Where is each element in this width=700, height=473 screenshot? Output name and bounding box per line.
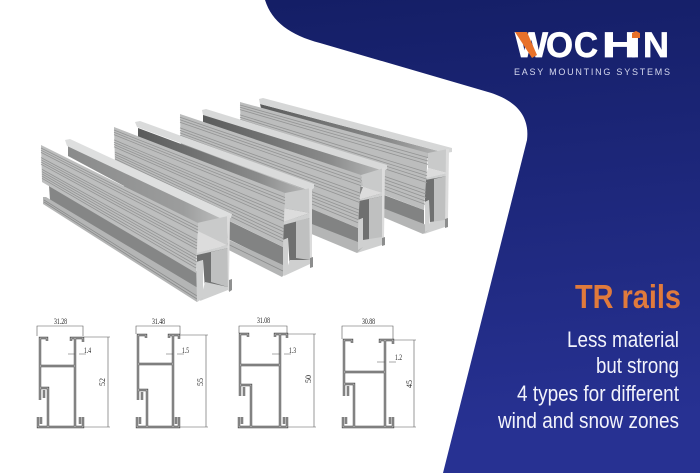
profile drawing 2: 55: [196, 378, 205, 386]
logo: C: [574, 26, 598, 65]
profile drawing 4: 45: [405, 380, 414, 388]
profile drawing 2: [136, 317, 208, 427]
panel: white content area: [0, 0, 527, 473]
profile drawing 3: 1.3: [289, 346, 296, 355]
profile drawing 1: 52: [98, 378, 107, 386]
logo: EASY MOUNTING SYSTEMS: [514, 67, 670, 77]
text block: product benefits: Less material: [567, 327, 679, 352]
profile drawing 4: 1.2: [395, 353, 402, 362]
logo: H: [602, 26, 638, 65]
heading: TR rails: TR rails: [575, 278, 681, 315]
logo: [514, 26, 670, 77]
profile drawing 3: [239, 316, 316, 427]
rail 3: [180, 109, 387, 253]
text block: product benefits: [497, 327, 679, 433]
logo: O: [546, 26, 573, 65]
logo: N: [643, 26, 669, 65]
profile drawing 2: 1.5: [182, 346, 189, 355]
profile drawing 3: 50: [304, 375, 313, 383]
profile drawing 1: [37, 317, 110, 427]
text block: product benefits: 4 types for different: [517, 381, 679, 406]
logo: W: [515, 26, 548, 65]
profile drawing 2: 31.48: [152, 317, 165, 326]
profile drawing 1: 31.28: [54, 317, 67, 326]
text block: product benefits: but strong: [596, 353, 679, 378]
profile drawing 1: 1.4: [84, 346, 91, 355]
profile drawing 4: [342, 317, 416, 427]
logo: I: [630, 26, 640, 65]
rail 1 (front): [41, 139, 232, 302]
profile drawing 4: 30.88: [362, 317, 375, 326]
rail 4 (rear): [240, 98, 452, 234]
profile drawing 3: 31.08: [257, 316, 270, 325]
rail 2: [114, 121, 314, 277]
